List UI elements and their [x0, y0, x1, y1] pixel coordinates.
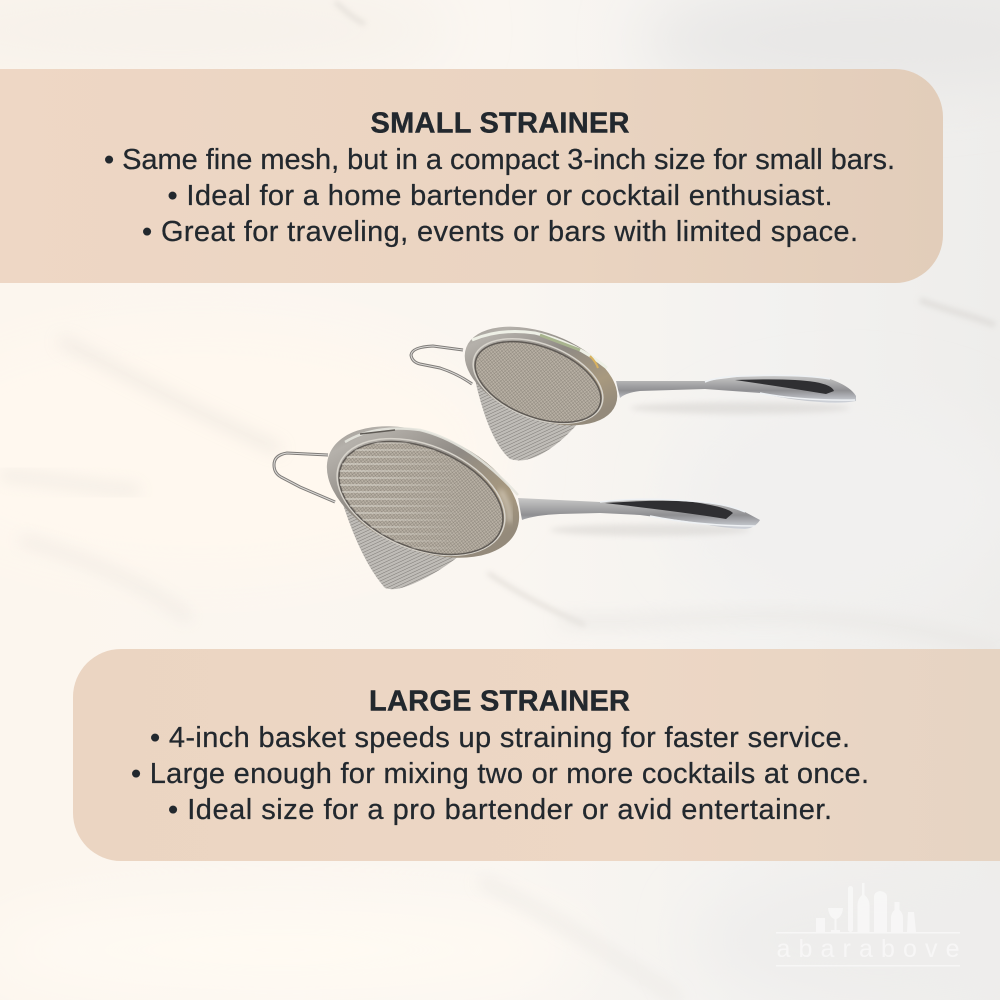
- icon: bar bottles: [816, 883, 916, 932]
- text: large strainer bullets: • 4-inch basket speeds up straining for faster service.: [150, 722, 850, 754]
- panel: large strainer: [73, 649, 1000, 861]
- heading: large strainer: LARGE STRAINER: [369, 686, 630, 718]
- text: small strainer bullets: [104, 144, 895, 248]
- panel: small strainer: [0, 69, 943, 283]
- text: abarabove wordmark: abarabove: [776, 935, 960, 963]
- panel background: large strainer: [73, 649, 1000, 861]
- panel background: small strainer: [0, 69, 943, 283]
- text: large strainer bullets: [131, 722, 869, 826]
- text: large strainer bullets: • Ideal size for a pro bartender or avid entertainer.: [168, 794, 832, 826]
- text: large strainer bullets: • Large enough for mixing two or more cocktails at once.: [131, 758, 869, 790]
- text: small strainer bullets: • Ideal for a home bartender or cocktail enthusiast.: [168, 180, 832, 212]
- logo: a bar above: [776, 883, 960, 966]
- heading: small strainer: SMALL STRAINER: [370, 108, 630, 140]
- photo: small strainer: [411, 307, 856, 460]
- text: small strainer bullets: • Same fine mesh, but in a compact 3-inch size for small bars.: [104, 144, 895, 176]
- photo: large strainer: [272, 426, 760, 590]
- text: small strainer bullets: • Great for traveling, events or bars with limited space.: [142, 216, 858, 248]
